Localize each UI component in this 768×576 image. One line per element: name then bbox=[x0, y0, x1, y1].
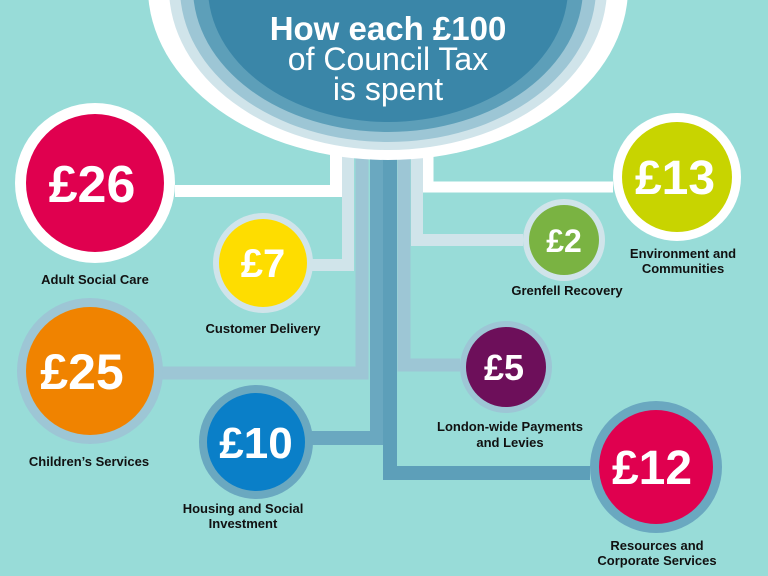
item: £2 Grenfell Recovery: Grenfell Recovery bbox=[511, 283, 623, 298]
item: £5 London-wide Payments and Levies: £5 bbox=[484, 347, 524, 388]
item: £26 Adult Social Care: £26 bbox=[49, 156, 135, 214]
item: £25 Children's Services bbox=[17, 298, 163, 469]
item: £13 Environment and Communities: £13 bbox=[635, 152, 715, 205]
item: £7 Customer Delivery: Customer Delivery bbox=[206, 321, 321, 336]
item: £5 London-wide Payments and Levies bbox=[437, 321, 583, 450]
item: £25 Children's Services: £25 bbox=[40, 344, 124, 400]
item: £7 Customer Delivery: £7 bbox=[241, 242, 285, 286]
title: of Council Tax bbox=[288, 41, 488, 77]
item: £26 Adult Social Care: Adult Social Care bbox=[41, 272, 149, 287]
item: £12 Resources and Corporate Services: £12 bbox=[612, 442, 692, 495]
item: £5 London-wide Payments and Levies: London-wide Payments bbox=[437, 419, 583, 434]
item: £25 Children's Services: Children’s Services bbox=[29, 454, 149, 469]
item: £10 Housing and Social Investment bbox=[183, 385, 313, 531]
item: £13 Environment and Communities: Environment and bbox=[630, 246, 736, 261]
item: £13 Environment and Communities bbox=[613, 113, 741, 276]
item: £2 Grenfell Recovery bbox=[511, 199, 623, 298]
title funnel bbox=[148, 0, 628, 160]
title: is spent bbox=[333, 71, 443, 107]
item: £10 Housing and Social Investment: £10 bbox=[219, 419, 293, 468]
item: £26 Adult Social Care bbox=[15, 103, 175, 287]
item: £10 Housing and Social Investment: Housing and Social bbox=[183, 501, 303, 516]
item: £2 Grenfell Recovery: £2 bbox=[546, 223, 582, 259]
item: £10 Housing and Social Investment: Investment bbox=[209, 516, 278, 531]
item: £12 Resources and Corporate Services: Corporate Services bbox=[597, 553, 717, 568]
item: £5 London-wide Payments and Levies: and Levies bbox=[476, 435, 544, 450]
item: £12 Resources and Corporate Services bbox=[590, 401, 722, 568]
title bbox=[270, 10, 506, 107]
item: £7 Customer Delivery bbox=[206, 213, 321, 336]
title: How each £100 bbox=[270, 10, 506, 47]
item: £13 Environment and Communities: Communities bbox=[642, 261, 724, 276]
connector lines bbox=[162, 120, 613, 473]
item: £12 Resources and Corporate Services: Resources and bbox=[610, 538, 704, 553]
